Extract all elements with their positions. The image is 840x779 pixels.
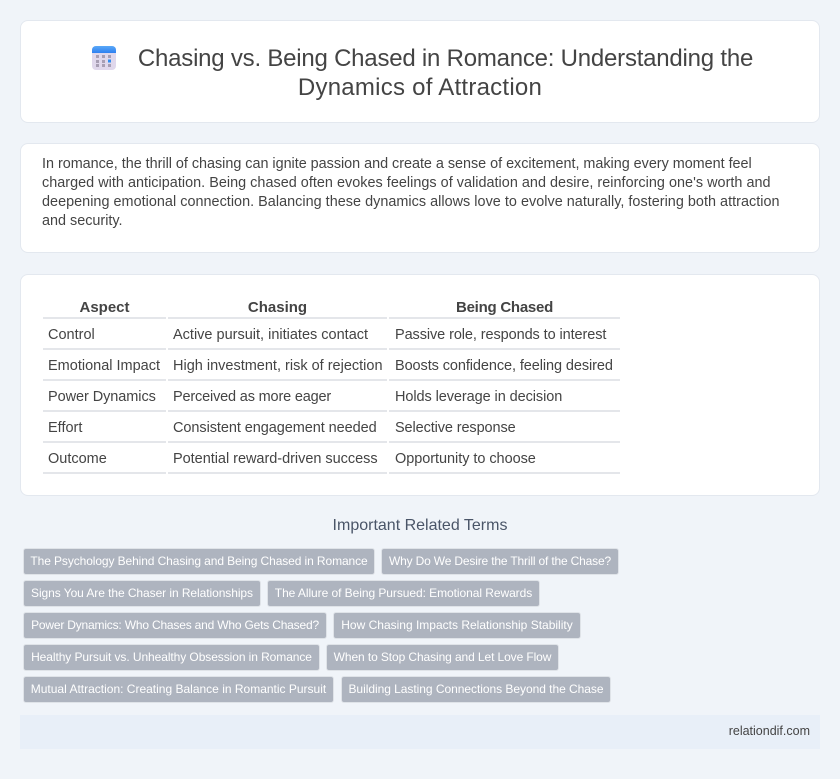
row: control xyxy=(48,327,606,343)
row: emotional impact: Emotional Impact xyxy=(48,358,160,374)
row: power dynamics: Power Dynamics xyxy=(48,389,156,405)
row: power dynamics: Holds leverage in decision xyxy=(395,389,562,405)
tag: When to Stop Chasing and Let Love Flow xyxy=(334,650,551,664)
tag: Healthy Pursuit vs. Unhealthy Obsession in Romance xyxy=(31,650,312,664)
footer source: relationdif.com xyxy=(729,724,810,738)
row: effort xyxy=(48,420,516,436)
row: outcome: Potential reward-driven success xyxy=(173,451,378,467)
row: control: Passive role, responds to interest xyxy=(395,327,606,343)
row: effort: Consistent engagement needed xyxy=(173,420,377,436)
row: control: Control xyxy=(48,327,95,343)
tag xyxy=(23,548,375,575)
row: outcome: Opportunity to choose xyxy=(395,451,536,467)
row: effort: Effort xyxy=(48,420,82,436)
related terms heading: Important Related Terms xyxy=(333,517,507,534)
tag: Mutual Attraction: Creating Balance in Romantic Pursuit xyxy=(31,682,326,696)
column headers: Chasing xyxy=(248,299,307,316)
tag xyxy=(23,676,334,703)
intro text: In romance, the thrill of chasing can ignite passion and create a sense of excitement, making every moment feel xyxy=(42,156,752,172)
row: outcome: Outcome xyxy=(48,451,107,467)
tag xyxy=(333,612,581,639)
row: emotional impact: High investment, risk of rejection xyxy=(173,358,383,374)
tag xyxy=(23,580,261,607)
intro text: and security. xyxy=(42,213,123,229)
intro panel xyxy=(20,143,820,253)
intro text: deepening emotional connection. Balancing these dynamics allows love to evolve naturally, fostering both attraction xyxy=(42,194,780,210)
tag: Signs You Are the Chaser in Relationships xyxy=(31,586,253,600)
tag xyxy=(267,580,540,607)
tag: Power Dynamics: Who Chases and Who Gets Chased? xyxy=(31,618,319,632)
intro text: charged with anticipation. Being chased often evokes feelings of validation and desire, reinforcing one's worth and xyxy=(42,175,771,191)
tag xyxy=(23,644,320,671)
row: power dynamics xyxy=(48,389,562,405)
title xyxy=(138,45,753,101)
tag: Building Lasting Connections Beyond the Chase xyxy=(348,682,604,696)
tag xyxy=(381,548,619,575)
intro text xyxy=(42,156,780,229)
tag xyxy=(23,612,327,639)
header card xyxy=(20,20,820,123)
row: effort: Selective response xyxy=(395,420,516,436)
table: chasing vs being chased xyxy=(43,299,620,474)
column headers: Being Chased xyxy=(456,299,553,316)
row: power dynamics: Perceived as more eager xyxy=(173,389,331,405)
footer bar xyxy=(20,715,820,749)
tag: The Psychology Behind Chasing and Being Chased in Romance xyxy=(30,554,368,568)
row: control: Active pursuit, initiates contact xyxy=(173,327,368,343)
title: Chasing vs. Being Chased in Romance: Understanding the xyxy=(138,45,753,72)
related term tags xyxy=(23,548,619,703)
tag: How Chasing Impacts Relationship Stability xyxy=(341,618,573,632)
tag: The Allure of Being Pursued: Emotional Rewards xyxy=(275,586,532,600)
row: emotional impact: Boosts confidence, feeling desired xyxy=(395,358,613,374)
row: emotional impact xyxy=(48,358,613,374)
title: Dynamics of Attraction xyxy=(298,74,542,101)
comparison table panel xyxy=(20,274,820,496)
tag xyxy=(326,644,559,671)
row: outcome xyxy=(48,451,536,467)
tag xyxy=(341,676,611,703)
tag: Why Do We Desire the Thrill of the Chase? xyxy=(389,554,611,568)
column headers xyxy=(79,299,553,316)
column headers: Aspect xyxy=(79,299,130,316)
icon: calendar xyxy=(92,46,116,70)
